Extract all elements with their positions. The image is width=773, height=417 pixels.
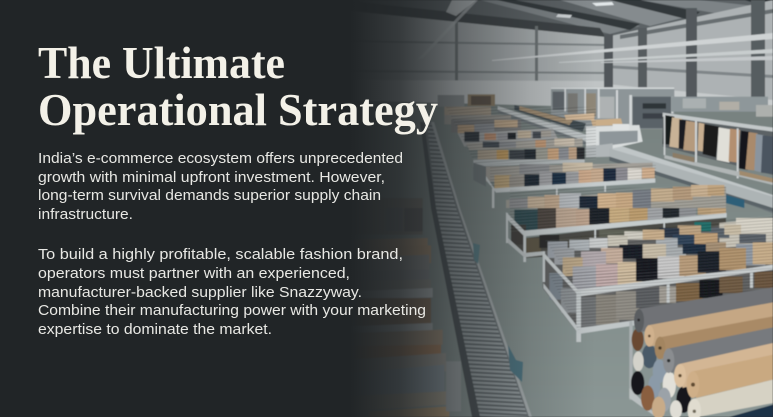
stock row D xyxy=(506,185,726,208)
strategy paragraph: manufacturer-backed supplier like Snazzyway. xyxy=(38,285,362,301)
intro paragraph xyxy=(38,151,403,223)
strategy paragraph xyxy=(38,247,426,338)
stock row A xyxy=(486,163,655,208)
title xyxy=(38,38,438,135)
right wall with columns xyxy=(604,0,773,112)
skylight wedge and ceiling lights xyxy=(417,0,773,63)
floor xyxy=(340,100,773,417)
left racks with rolls and stacks, dimmed xyxy=(349,198,461,417)
intro paragraph: infrastructure. xyxy=(38,207,133,223)
ceiling and roof beams xyxy=(340,0,773,110)
intro paragraph: growth with minimal upfront investment. However, xyxy=(38,170,385,186)
far rows of folded stock xyxy=(444,107,585,187)
long rear conveyor and packing table xyxy=(498,105,773,213)
intro paragraph: long-term survival demands superior supply chain xyxy=(38,188,381,204)
strategy paragraph: Combine their manufacturing power with your marketing xyxy=(38,303,426,319)
back wall xyxy=(340,10,606,110)
strategy paragraph: operators must partner with an experienced, xyxy=(38,266,350,282)
back shelving and rear equipment, zoom-space group xyxy=(438,87,773,129)
roller conveyor xyxy=(420,122,532,417)
intro paragraph: India’s e-commerce ecosystem offers unprecedented xyxy=(38,151,403,167)
warehouse photo background xyxy=(340,0,773,417)
strategy paragraph: expertise to dominate the market. xyxy=(38,322,272,338)
fabric rolls xyxy=(634,287,773,417)
title: Operational Strategy xyxy=(38,85,438,135)
hanging garments rack xyxy=(663,113,773,185)
title: The Ultimate xyxy=(38,38,285,88)
folded garment texture over stock rows xyxy=(446,107,773,330)
fabric roll rack xyxy=(629,287,773,417)
strategy paragraph: To build a highly profitable, scalable fashion brand, xyxy=(38,247,403,263)
stock row E with lower shelf xyxy=(543,218,773,342)
rear conveyor lower edge and blue panel xyxy=(609,148,773,212)
